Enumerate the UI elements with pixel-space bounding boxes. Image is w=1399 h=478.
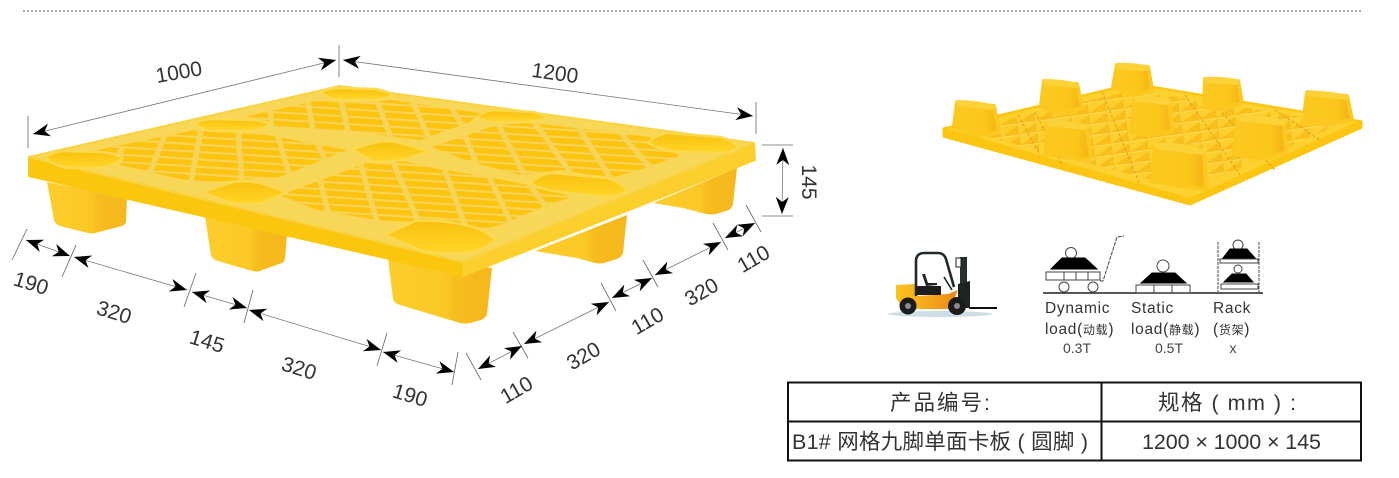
pocket: centre — [352, 141, 428, 162]
label: rack: (货架) — [1213, 321, 1250, 338]
pocket: back corner — [320, 88, 393, 100]
cell: dimensions: 1200 × 1000 × 145 — [1142, 430, 1321, 454]
header: product code: 产品编号: — [890, 391, 990, 415]
dotted divider — [23, 10, 1362, 12]
icon: dynamic load — [1046, 236, 1124, 292]
pallet side right — [463, 143, 755, 276]
dimensions: right side spacing: 110 — [628, 303, 668, 340]
pocket: back left — [195, 119, 270, 131]
header: size: 规格 ( mm ) : — [1158, 391, 1296, 415]
label: static load: Static — [1131, 300, 1174, 317]
label: rack: Rack — [1213, 300, 1251, 317]
dimensions: left side spacing: 320 — [94, 297, 134, 329]
dimensions: left side spacing: 190 — [390, 380, 430, 412]
dimensions: right side spacing: 110 — [734, 241, 774, 278]
label: dynamic load: load(动载) — [1045, 321, 1114, 338]
lattice zone right — [432, 123, 685, 176]
pallet side left — [29, 157, 463, 276]
underside leg back — [1113, 64, 1152, 96]
dimension: 145 height: 145 — [797, 164, 820, 200]
label: rack — [1213, 300, 1251, 356]
pallet top face — [29, 86, 754, 262]
leg: right middle — [535, 215, 627, 264]
underside leg centre — [1131, 97, 1172, 135]
main pallet photo — [29, 86, 755, 324]
ground line — [1043, 292, 1263, 294]
pocket: front left — [203, 181, 287, 204]
lattice zone front — [282, 160, 570, 228]
label: dynamic load — [1045, 300, 1114, 356]
label: static load: load(静载) — [1131, 321, 1200, 338]
leg: front left — [205, 217, 287, 272]
icon: rack load — [1218, 240, 1259, 293]
underside leg back right — [1204, 78, 1242, 109]
dimensions: right side spacing — [466, 205, 774, 409]
cell: product name: B1# 网格九脚单面卡板 ( 圆脚 ) — [792, 430, 1088, 454]
underside ribs — [1018, 92, 1320, 185]
dimensions: left side spacing — [11, 229, 458, 412]
icon: forklift — [888, 253, 997, 317]
dimensions: right side spacing: 320 — [563, 338, 605, 375]
pocket: front corner — [385, 221, 495, 253]
label: static load — [1131, 300, 1200, 356]
label: static load: 0.5T — [1155, 340, 1183, 356]
dimensions: left side spacing: 190 — [11, 268, 51, 300]
underside leg left — [954, 101, 999, 136]
leg: left — [47, 182, 127, 234]
lattice zone back — [245, 100, 480, 140]
underside leg front — [1152, 144, 1206, 189]
label: rack: x — [1230, 340, 1236, 356]
underside leg front right — [1234, 116, 1286, 159]
dimension: 1000 width: 1000 — [154, 57, 204, 88]
underside pallet photo — [943, 64, 1362, 205]
pocket: right corner — [648, 133, 739, 153]
label: dynamic load: 0.3T — [1063, 340, 1091, 356]
dimensions: left side spacing: 320 — [279, 353, 319, 385]
dimensions: left side spacing: 145 — [187, 326, 227, 358]
label: dynamic load: Dynamic — [1045, 300, 1110, 317]
underside leg right — [1303, 91, 1352, 124]
load icons and labels — [1043, 236, 1263, 356]
leg: front corner — [388, 258, 492, 324]
dimension: 1000 width — [28, 45, 339, 148]
pocket: left corner — [45, 151, 123, 168]
pocket: right middle — [530, 173, 628, 197]
dimension: 1200 length — [343, 59, 756, 134]
specification table — [788, 382, 1361, 461]
dimension: 145 height — [762, 145, 820, 216]
underside lattice — [962, 90, 1342, 190]
pocket: back right — [477, 110, 547, 122]
dimension: 1200 length: 1200 — [530, 59, 580, 88]
underside leg back left — [1041, 80, 1082, 114]
icon: static load — [1136, 260, 1190, 293]
underside plate edge — [943, 83, 1362, 205]
leg: back right — [653, 168, 737, 214]
underside rim — [948, 85, 1357, 198]
dimensions: right side spacing: 110 — [497, 372, 537, 409]
underside leg front left — [1046, 121, 1091, 160]
lattice zone left — [97, 130, 347, 183]
dimensions: right side spacing: 320 — [681, 274, 723, 311]
